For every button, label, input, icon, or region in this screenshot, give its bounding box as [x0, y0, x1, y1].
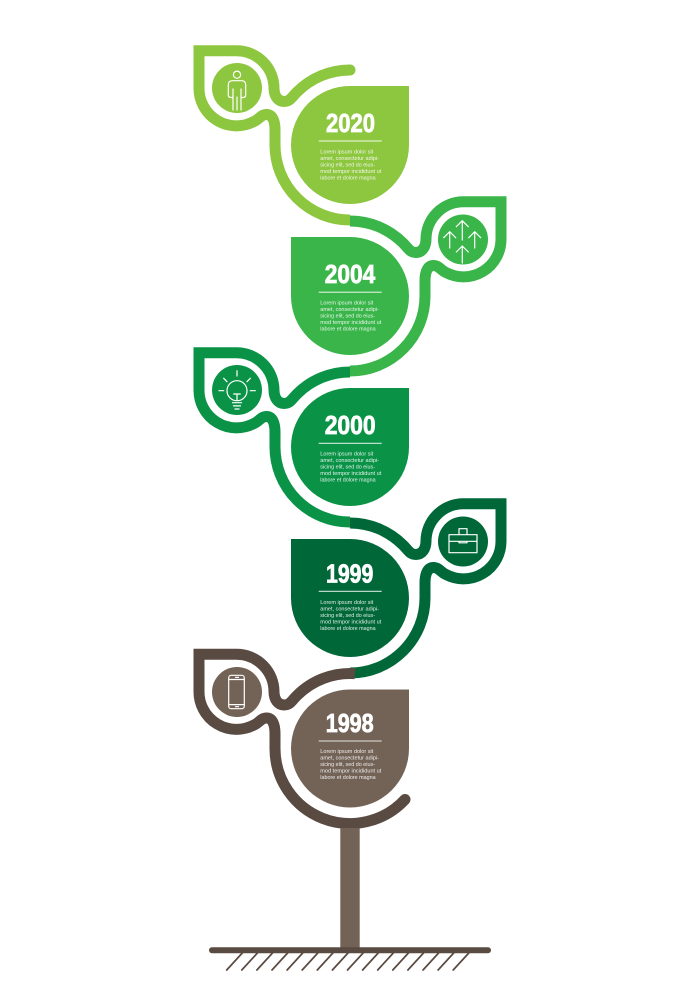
description 2000: mod tempor incididunt ut — [320, 471, 382, 477]
icon: arrows up — [438, 214, 488, 264]
description 2004: sicing elit, sed do eius- — [320, 313, 375, 319]
icon: briefcase — [438, 516, 488, 566]
year 2000: 2000 — [325, 412, 376, 440]
vine and leaf outline 2000 — [199, 353, 350, 522]
description 2020: labore et dolore magna — [320, 176, 377, 182]
description 1999: amet, consectetur adipi- — [320, 606, 379, 612]
ground line — [209, 947, 491, 953]
description 2020: mod tempor incididunt ut — [320, 169, 382, 175]
drop panel 2000 — [291, 388, 409, 506]
year 1999: 1999 — [326, 560, 373, 588]
drop panel 1999 — [291, 539, 409, 657]
description 2020: amet, consectetur adipi- — [320, 156, 379, 162]
drop panel 2004 — [291, 237, 409, 355]
year 2004: 2004 — [325, 261, 376, 289]
description 1999: mod tempor incididunt ut — [320, 619, 382, 625]
description 1999: Lorem ipsum dolor sit — [320, 600, 374, 606]
description 2004 — [320, 300, 382, 332]
description 1999: labore et dolore magna — [320, 626, 377, 632]
description 1998: Lorem ipsum dolor sit — [320, 749, 374, 755]
description 2000: sicing elit, sed do eius- — [320, 465, 375, 471]
description 2020: Lorem ipsum dolor sit — [320, 150, 374, 156]
description 2000 — [320, 452, 382, 484]
description 2000: amet, consectetur adipi- — [320, 458, 379, 464]
description 1999: sicing elit, sed do eius- — [320, 613, 375, 619]
icon: light bulb — [212, 365, 262, 415]
icon: person — [212, 63, 262, 113]
description 2004: amet, consectetur adipi- — [320, 307, 379, 313]
description 2020: sicing elit, sed do eius- — [320, 163, 375, 169]
tree trunk — [340, 828, 360, 950]
stage: 1999 — [291, 504, 501, 673]
stage: 2020 — [199, 51, 409, 220]
description 1998: sicing elit, sed do eius- — [320, 762, 375, 768]
vine and leaf outline 2004 — [350, 202, 501, 371]
description 1999 — [320, 600, 382, 632]
description 2004: mod tempor incididunt ut — [320, 320, 382, 326]
vine and leaf outline 1999 — [350, 504, 501, 673]
description 2000: labore et dolore magna — [320, 478, 377, 484]
year 2020: 2020 — [326, 110, 375, 138]
stage: 1998 — [199, 654, 410, 824]
description 2020 — [320, 150, 382, 182]
stage: 2000 — [199, 353, 409, 522]
description 2004: labore et dolore magna — [320, 326, 377, 332]
drop panel 2020 — [291, 86, 409, 204]
description 2004: Lorem ipsum dolor sit — [320, 300, 374, 306]
ground hatching — [227, 953, 469, 970]
vine and leaf outline 2020 — [199, 51, 356, 220]
description 1998 — [320, 749, 382, 781]
description 1998: amet, consectetur adipi- — [320, 756, 379, 762]
icon: smartphone — [212, 667, 262, 717]
description 2000: Lorem ipsum dolor sit — [320, 452, 374, 458]
description 1998: labore et dolore magna — [320, 775, 377, 781]
vine and leaf outline 1998 — [199, 654, 410, 824]
description 1998: mod tempor incididunt ut — [320, 769, 382, 775]
stage: 2004 — [291, 202, 501, 371]
drop panel 1998 — [291, 690, 409, 808]
year 1998: 1998 — [326, 710, 374, 738]
